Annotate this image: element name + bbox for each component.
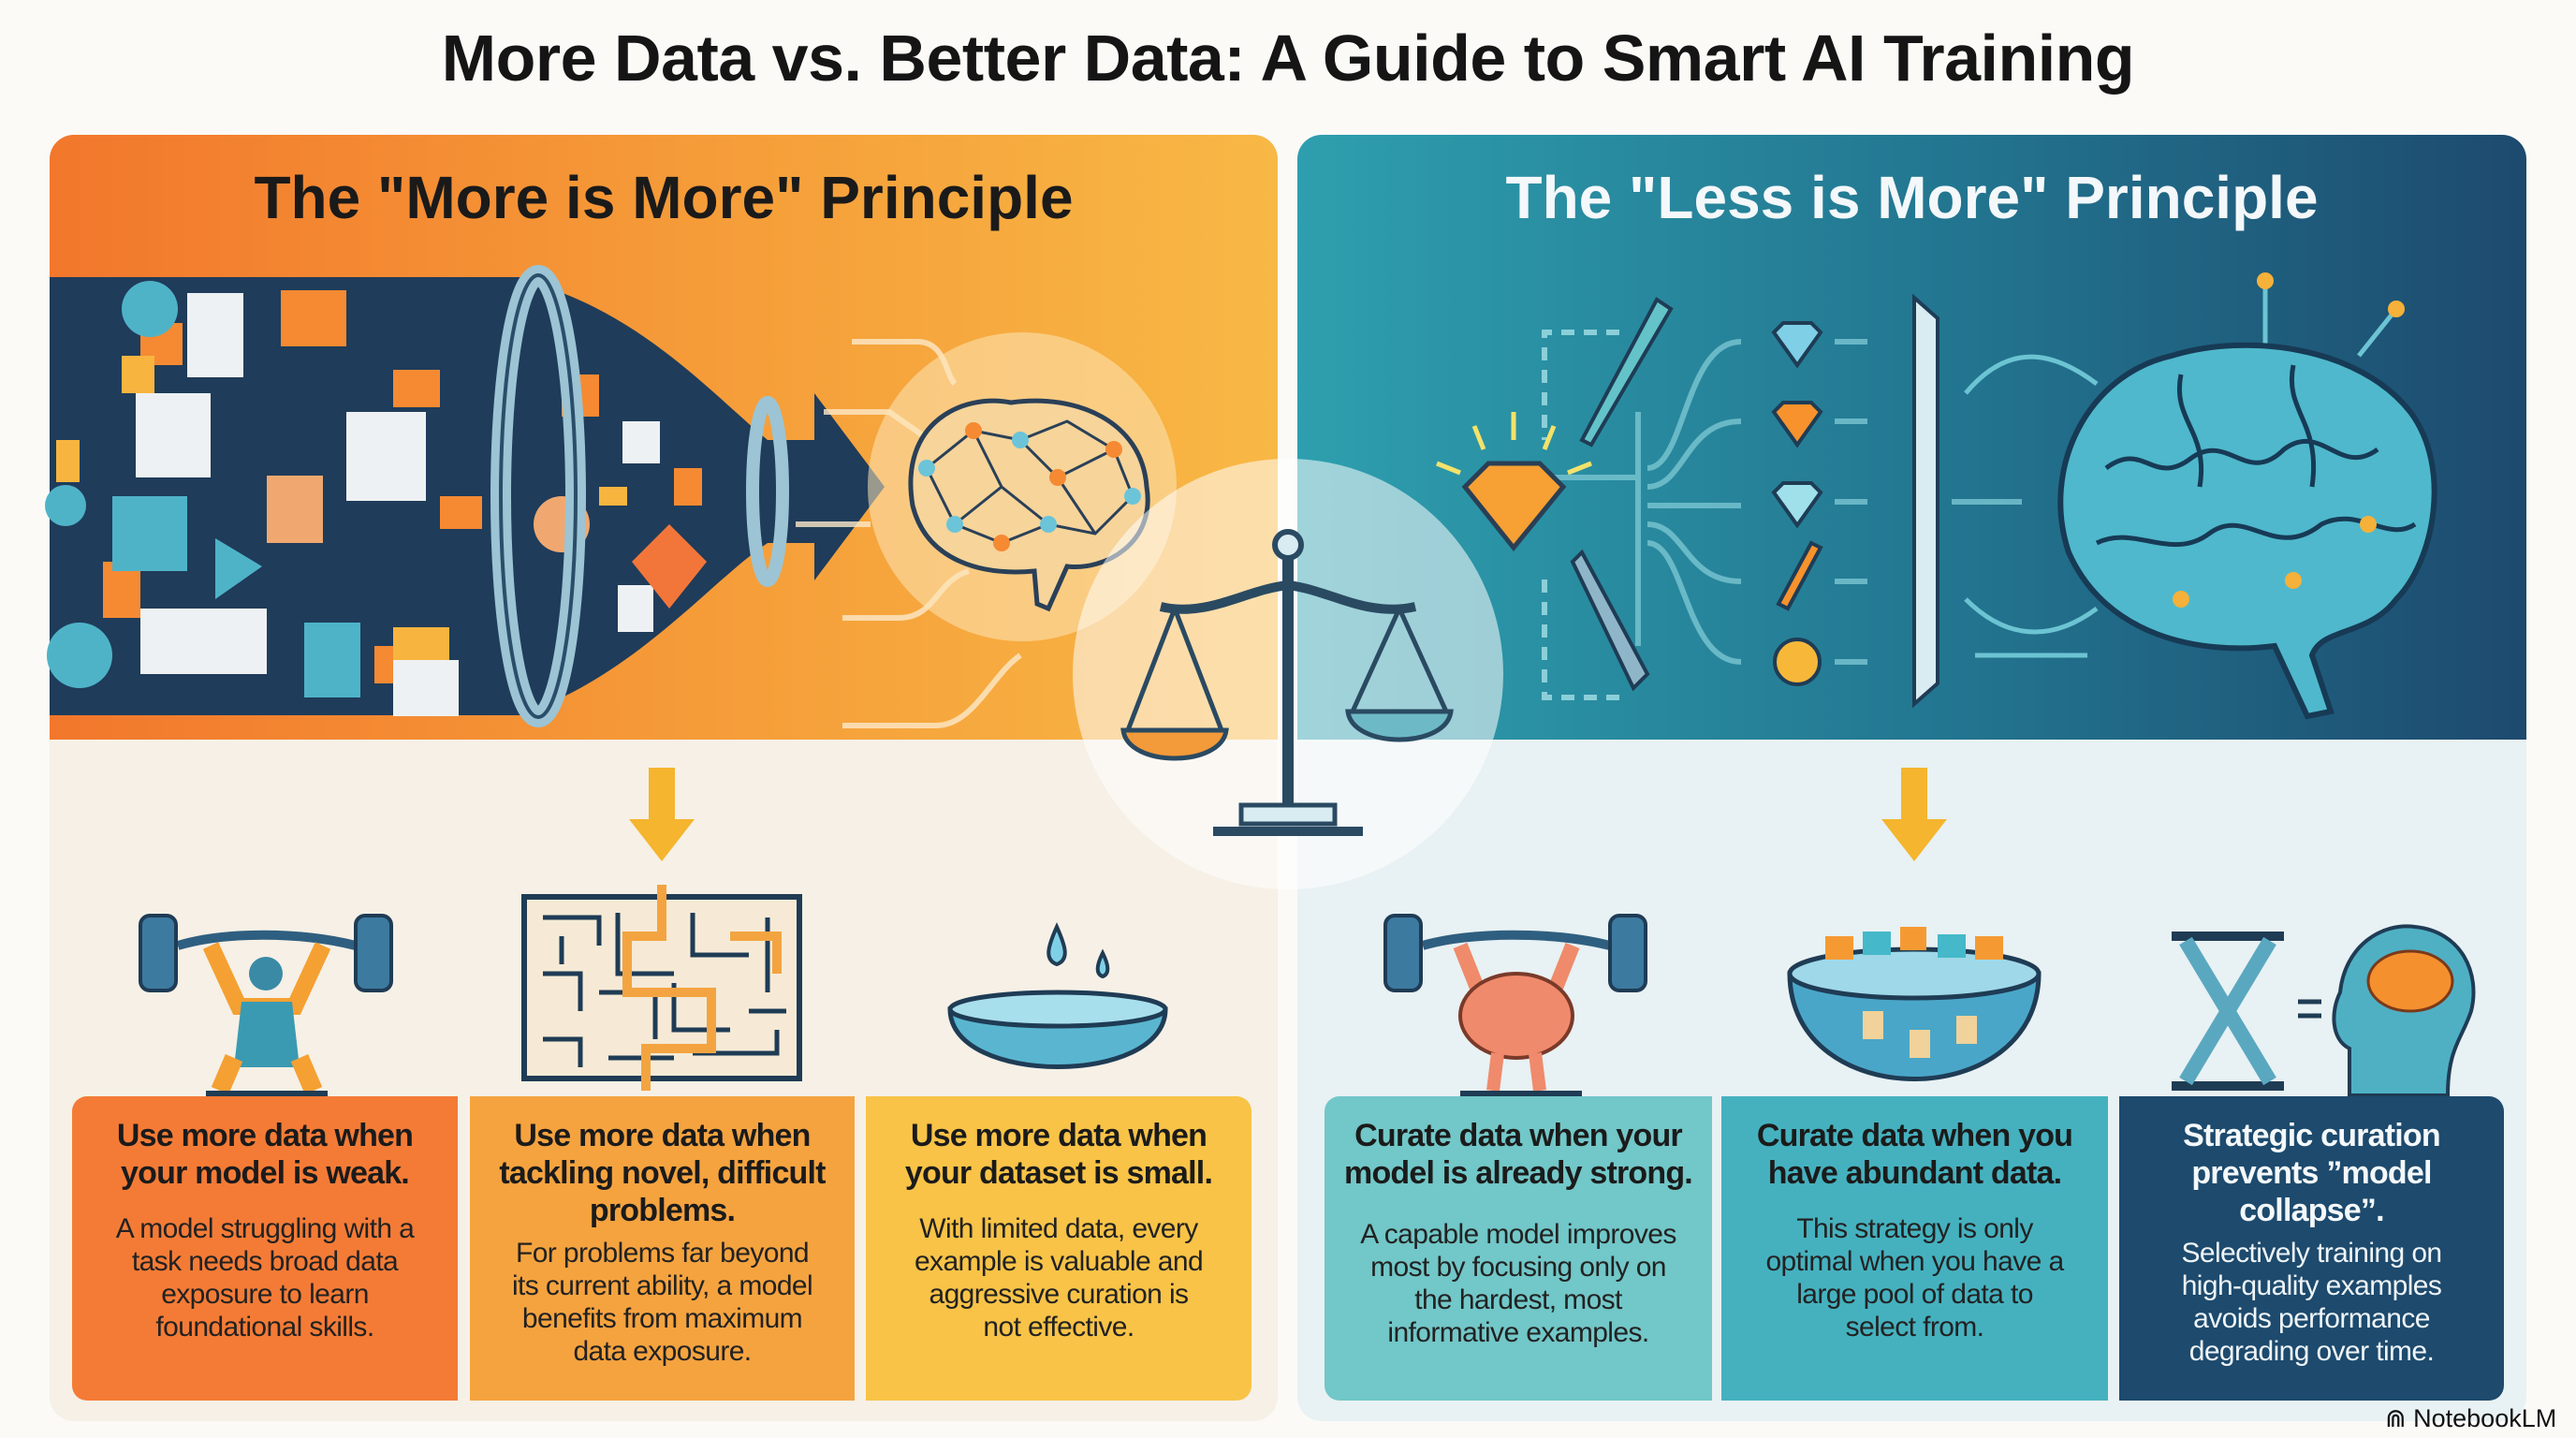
card: abundant data: optimal when you have a <box>1765 1246 2064 1277</box>
icon: bowl of data <box>1790 927 2039 1078</box>
title: More Data vs. Better Data: A Guide to Smart AI Training <box>442 22 2134 95</box>
card: dataset small: your dataset is small. <box>905 1155 1212 1191</box>
card: model is weak <box>72 1096 458 1401</box>
card: model collapse <box>2119 1096 2504 1401</box>
icon: balance scale <box>1073 459 1503 889</box>
card: dataset small: With limited data, every <box>919 1213 1198 1244</box>
icon: bowl with drops <box>950 927 1165 1067</box>
card: model collapse: collapse”. <box>2239 1193 2384 1228</box>
illustration: teal brain <box>1966 272 2435 716</box>
card: dataset small: Use more data when <box>911 1118 1207 1153</box>
card: abundant data: select from. <box>1846 1312 1983 1343</box>
card: novel problems: Use more data when <box>514 1118 811 1153</box>
card: model strong: Curate data when your <box>1354 1118 1682 1153</box>
card: novel problems: its current ability, a model <box>512 1270 812 1301</box>
card: model collapse: Selectively training on <box>2181 1238 2442 1269</box>
card: model collapse: avoids performance <box>2193 1303 2430 1334</box>
card: model strong: most by focusing only on <box>1370 1252 1666 1283</box>
card: dataset small: example is valuable and <box>915 1246 1203 1277</box>
card: model strong: model is already strong. <box>1344 1155 1692 1191</box>
card: abundant data <box>1721 1096 2108 1401</box>
card: model collapse: Strategic curation <box>2183 1118 2440 1153</box>
icon: weightlifter <box>140 916 391 1093</box>
card: abundant data: have abundant data. <box>1768 1155 2061 1191</box>
card: model strong: informative examples. <box>1387 1317 1649 1348</box>
card: model is weak: foundational skills. <box>155 1312 374 1343</box>
card: dataset small: aggressive curation is <box>929 1279 1188 1310</box>
card: model collapse: prevents ”model <box>2191 1155 2432 1191</box>
card: novel problems: For problems far beyond <box>516 1238 809 1269</box>
icon: brain lifter <box>1385 916 1646 1093</box>
panel header band: more <box>50 135 1278 740</box>
card: novel problems: problems. <box>590 1193 735 1228</box>
card: novel problems <box>470 1096 855 1401</box>
icon: hourglass and head <box>2172 926 2473 1095</box>
card: novel problems: tackling novel, difficult <box>499 1155 826 1191</box>
panel: more is more <box>50 135 1278 1421</box>
logo: NotebookLM: ⋒ NotebookLM <box>2385 1404 2556 1432</box>
card: model collapse: degrading over time. <box>2189 1336 2434 1367</box>
arrow: right down <box>1881 768 1947 861</box>
panel: less is more <box>1297 135 2526 1421</box>
card: abundant data: large pool of data to <box>1796 1279 2033 1310</box>
card: dataset small <box>866 1096 1251 1401</box>
card: novel problems: data exposure. <box>573 1336 752 1367</box>
card: model is weak: exposure to learn <box>161 1279 369 1310</box>
icon: maze <box>524 885 799 1091</box>
card: model strong: A capable model improves <box>1360 1219 1676 1250</box>
illustration: data funnel <box>45 275 1020 726</box>
card: dataset small: not effective. <box>983 1312 1134 1343</box>
card: model is weak: A model struggling with a <box>116 1213 414 1244</box>
arrow: left down <box>629 768 695 861</box>
heading: more is more: The "More is More" Principle <box>254 164 1074 231</box>
card: model is weak: Use more data when <box>117 1118 413 1153</box>
illustration: network brain <box>868 332 1177 641</box>
illustration: gem curation pipeline <box>1437 298 2022 704</box>
panel header band: less <box>1297 135 2526 740</box>
heading: less is more: The "Less is More" Principle <box>1505 164 2319 231</box>
card: model strong: the hardest, most <box>1414 1284 1622 1315</box>
card: model strong <box>1325 1096 1712 1401</box>
card: abundant data: Curate data when you <box>1757 1118 2072 1153</box>
card: abundant data: This strategy is only <box>1796 1213 2033 1244</box>
card: model collapse: high-quality examples <box>2182 1270 2441 1301</box>
card: model is weak: task needs broad data <box>132 1246 398 1277</box>
card: novel problems: benefits from maximum <box>522 1303 802 1334</box>
card: model is weak: your model is weak. <box>121 1155 409 1191</box>
